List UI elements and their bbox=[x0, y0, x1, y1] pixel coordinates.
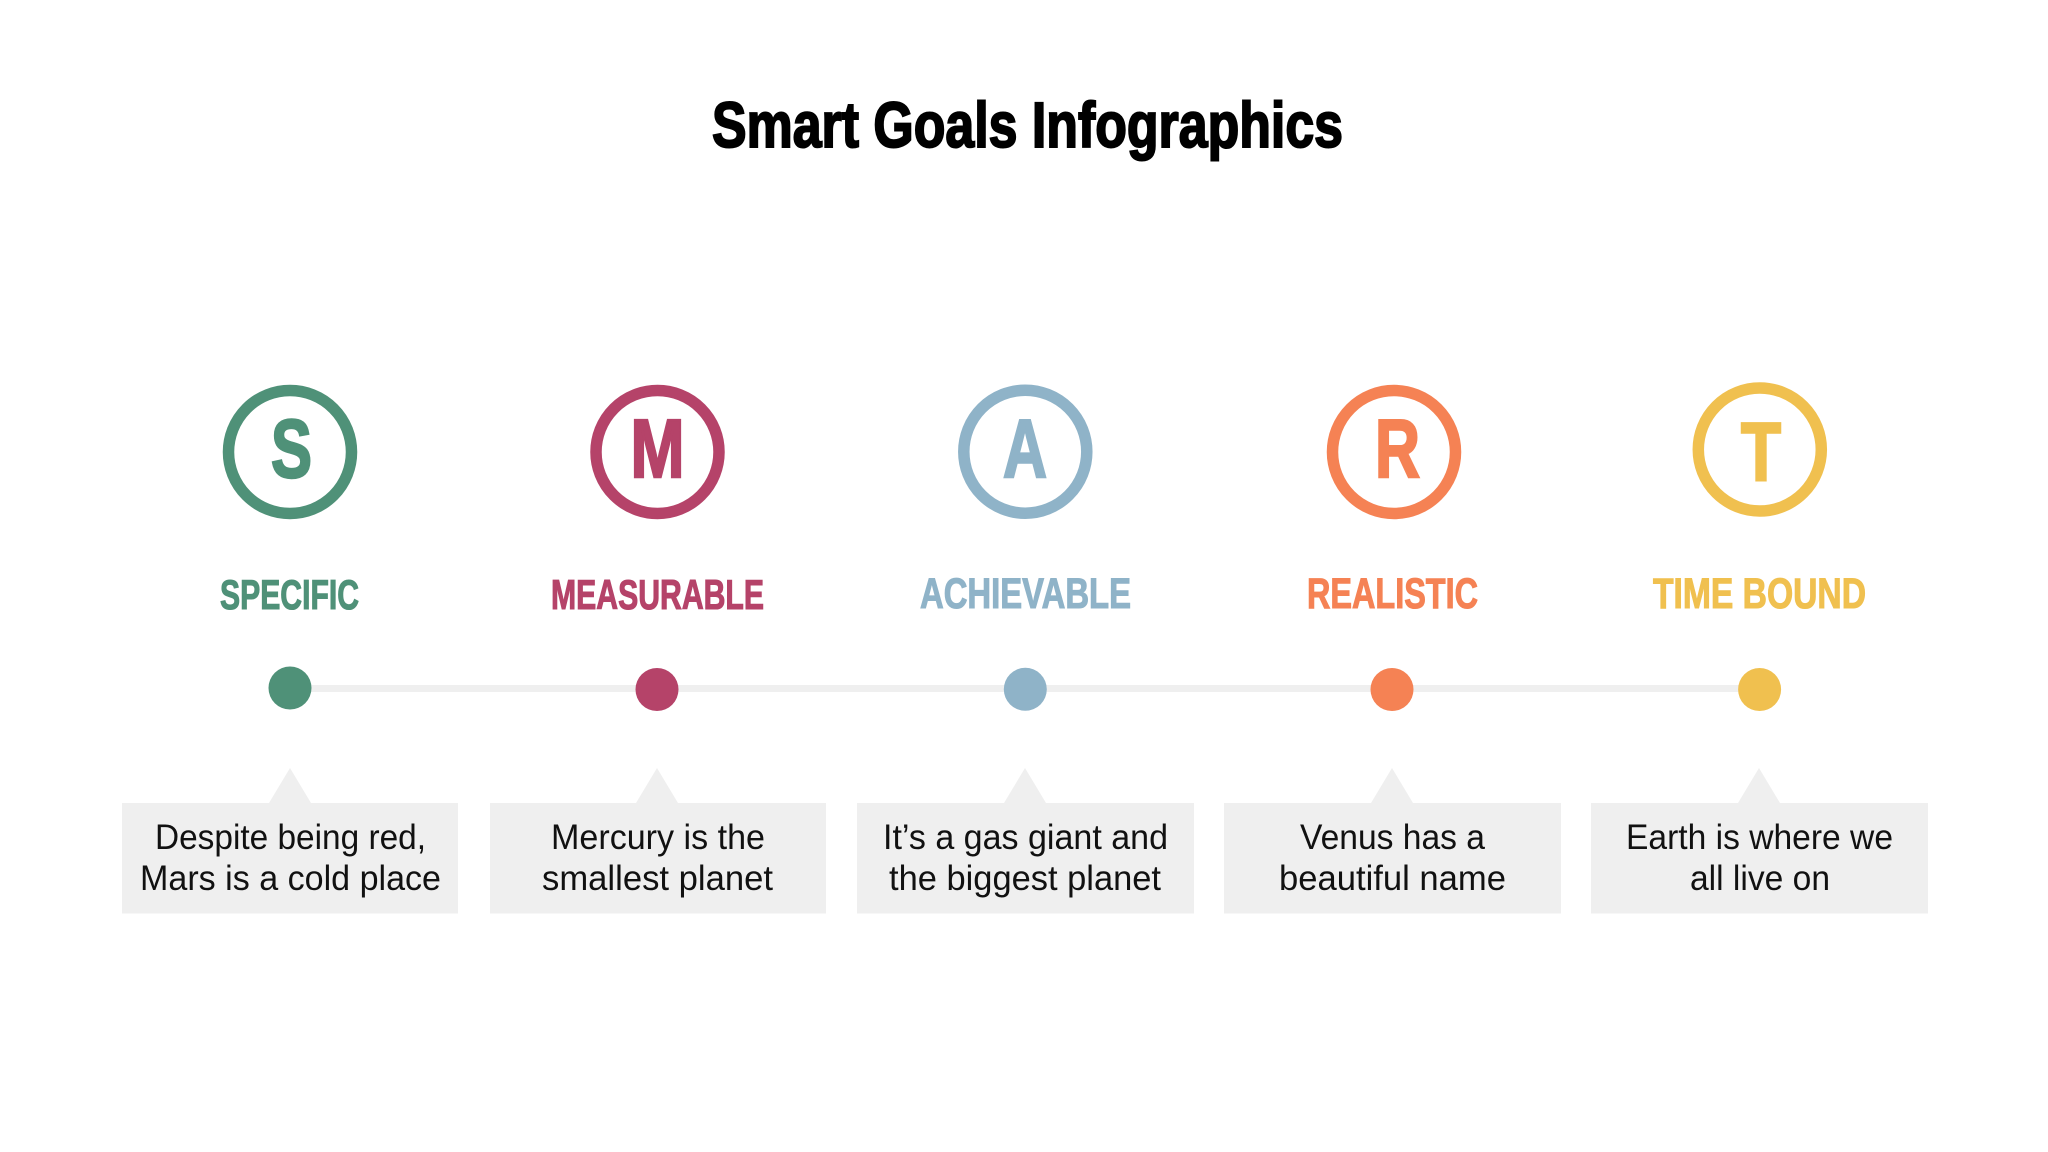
icon: letter T badge: T bbox=[1741, 405, 1781, 498]
icon: letter A badge bbox=[964, 390, 1087, 513]
timeline dot: measurable bbox=[636, 668, 678, 711]
timeline dot: achievable bbox=[1004, 668, 1047, 711]
icon: letter R badge: R bbox=[1375, 402, 1420, 495]
icon: letter T badge bbox=[1698, 388, 1821, 511]
column: measurable bbox=[490, 390, 826, 914]
callout: achievable: It’s a gas giant and bbox=[883, 818, 1168, 857]
icon: letter M badge: M bbox=[630, 402, 684, 495]
column: specific bbox=[122, 390, 458, 914]
column: achievable bbox=[857, 390, 1194, 914]
icon: letter A badge: A bbox=[1003, 402, 1047, 495]
callout: measurable: smallest planet bbox=[542, 859, 773, 898]
heading: time bound: TIME BOUND bbox=[1653, 570, 1866, 618]
callout: realistic bbox=[1224, 768, 1561, 914]
icon: letter R badge bbox=[1332, 390, 1456, 514]
callout: time bound bbox=[1591, 768, 1928, 914]
timeline connector line bbox=[300, 685, 1750, 692]
callout: specific: Despite being red, bbox=[155, 818, 426, 857]
callout: achievable bbox=[857, 768, 1194, 914]
heading: achievable: ACHIEVABLE bbox=[920, 570, 1131, 618]
icon: letter S badge bbox=[228, 390, 352, 514]
callout: measurable: Mercury is the bbox=[551, 818, 765, 857]
heading: measurable: MEASURABLE bbox=[551, 571, 764, 618]
column: time bound bbox=[1591, 388, 1928, 914]
timeline dot: realistic bbox=[1370, 668, 1414, 711]
timeline dot: time bound bbox=[1738, 668, 1781, 711]
heading: realistic: REALISTIC bbox=[1307, 570, 1478, 618]
callout: achievable: the biggest planet bbox=[889, 859, 1161, 898]
callout: realistic: beautiful name bbox=[1279, 859, 1506, 898]
icon: letter M badge bbox=[596, 390, 719, 514]
callout: realistic: Venus has a bbox=[1300, 818, 1486, 857]
callout: time bound: all live on bbox=[1690, 859, 1830, 898]
callout: specific: Mars is a cold place bbox=[140, 859, 441, 898]
callout: measurable bbox=[490, 768, 826, 914]
column: realistic bbox=[1224, 390, 1561, 914]
title: Smart Goals Infographics bbox=[712, 89, 1343, 161]
heading: specific: SPECIFIC bbox=[220, 571, 359, 618]
callout: specific bbox=[122, 768, 458, 914]
icon: letter S badge: S bbox=[271, 402, 312, 495]
callout: time bound: Earth is where we bbox=[1626, 818, 1893, 857]
timeline dot: specific bbox=[268, 666, 312, 710]
